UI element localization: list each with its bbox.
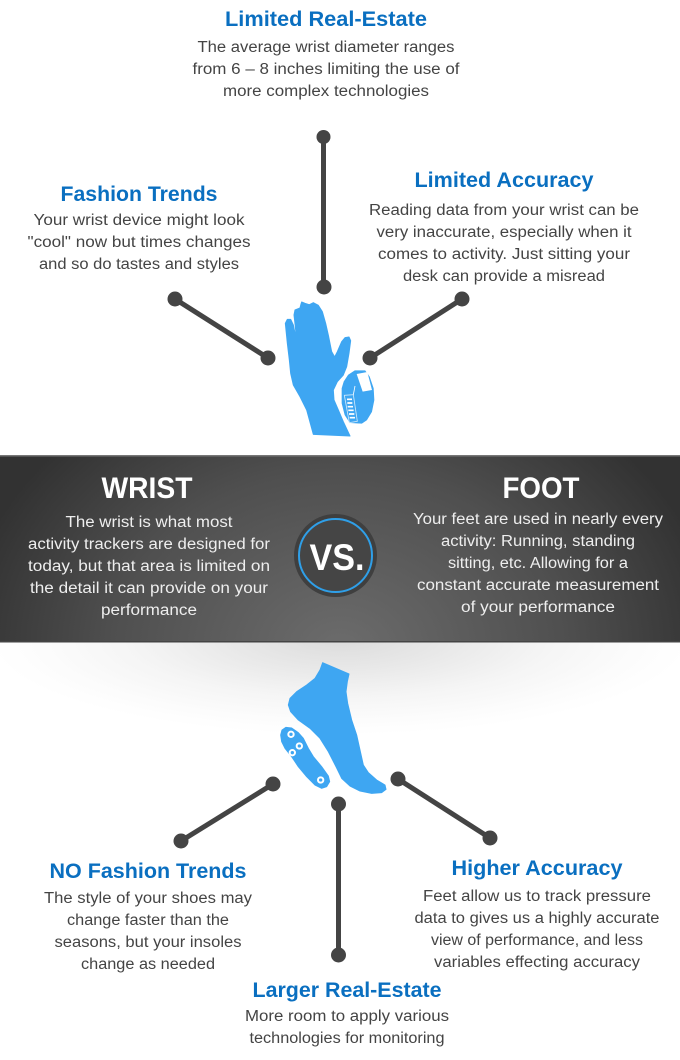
text block: Higher Accuracy: data to gives us a highly accurate	[414, 910, 660, 927]
text block: NO Fashion Trends: The style of your shoes may	[44, 890, 252, 907]
connector: bottom right	[390, 772, 498, 846]
text block: wrist description: activity trackers are designed for	[28, 536, 270, 553]
text block: Limited Accuracy: Reading data from your wrist can be	[369, 202, 639, 219]
text block: Higher Accuracy: Feet allow us to track pressure	[423, 888, 651, 905]
text block: wrist description: performance	[101, 602, 197, 619]
icon: foot and insole	[281, 663, 386, 793]
icon: hand with wrist tracker	[285, 302, 374, 436]
text block: Fashion Trends: Fashion Trends	[60, 183, 218, 206]
background shadow under band	[0, 640, 680, 736]
text block: NO Fashion Trends	[44, 860, 252, 973]
text block: Higher Accuracy: variables effecting accuracy	[434, 954, 640, 971]
text block: Limited Accuracy: comes to activity. Just sitting your	[378, 246, 630, 263]
text block: Limited Real-Estate: from 6 – 8 inches limiting the use of	[192, 61, 460, 78]
text block: foot description: sitting, etc. Allowing for a	[448, 555, 628, 572]
text block: wrist description	[28, 472, 270, 619]
text block: Limited Real-Estate	[192, 8, 460, 100]
icon: VS badge	[294, 514, 377, 597]
text block: Limited Accuracy: desk can provide a misread	[403, 268, 605, 285]
text block: wrist description: The wrist is what most	[66, 514, 233, 531]
connector: top left	[168, 292, 276, 366]
text block: foot description: constant accurate measurement	[417, 577, 660, 594]
text block: Higher Accuracy: view of performance, and less	[431, 932, 643, 949]
text block: Limited Accuracy: very inaccurate, especially when it	[376, 224, 632, 241]
text block: Larger Real-Estate: More room to apply various	[245, 1008, 449, 1025]
text block: NO Fashion Trends: change as needed	[81, 956, 215, 973]
connector: top centre	[316, 130, 332, 294]
text block: wrist description: WRIST	[102, 472, 192, 505]
text block: wrist description: the detail it can provide on your	[30, 580, 268, 597]
text block: foot description	[413, 472, 663, 616]
panel: central comparison band	[0, 455, 680, 642]
text block: Fashion Trends: Your wrist device might look	[34, 212, 245, 229]
text block: foot description: FOOT	[502, 472, 580, 505]
icon: VS badge: VS.	[310, 537, 364, 578]
connector: bottom centre	[331, 796, 346, 962]
text block: Limited Accuracy	[369, 169, 639, 285]
text block: Higher Accuracy	[414, 857, 660, 971]
text block: wrist description: today, but that area is limited on	[28, 558, 270, 575]
text block: NO Fashion Trends: seasons, but your insoles	[54, 934, 242, 951]
text block: Limited Real-Estate: The average wrist diameter ranges	[198, 39, 455, 56]
text block: Higher Accuracy: Higher Accuracy	[452, 857, 623, 880]
text block: Larger Real-Estate: Larger Real-Estate	[252, 979, 442, 1002]
text block: Larger Real-Estate: technologies for monitoring	[250, 1030, 444, 1047]
text block: Limited Real-Estate: Limited Real-Estate	[225, 8, 427, 31]
text block: Fashion Trends: "cool" now but times changes	[28, 234, 251, 251]
text block: Fashion Trends	[28, 183, 251, 273]
text block: NO Fashion Trends: change faster than the	[67, 912, 229, 929]
text block: NO Fashion Trends: NO Fashion Trends	[50, 860, 246, 883]
connector: bottom left	[174, 776, 280, 848]
text block: foot description: activity: Running, standing	[441, 533, 635, 550]
text block: Larger Real-Estate	[245, 979, 449, 1047]
text block: Limited Real-Estate: more complex technologies	[223, 83, 429, 100]
text block: Limited Accuracy: Limited Accuracy	[414, 169, 594, 192]
text block: foot description: Your feet are used in nearly every	[413, 511, 663, 528]
connector: top right	[362, 292, 470, 366]
text block: Fashion Trends: and so do tastes and styles	[39, 256, 239, 273]
text block: foot description: of your performance	[461, 599, 615, 616]
